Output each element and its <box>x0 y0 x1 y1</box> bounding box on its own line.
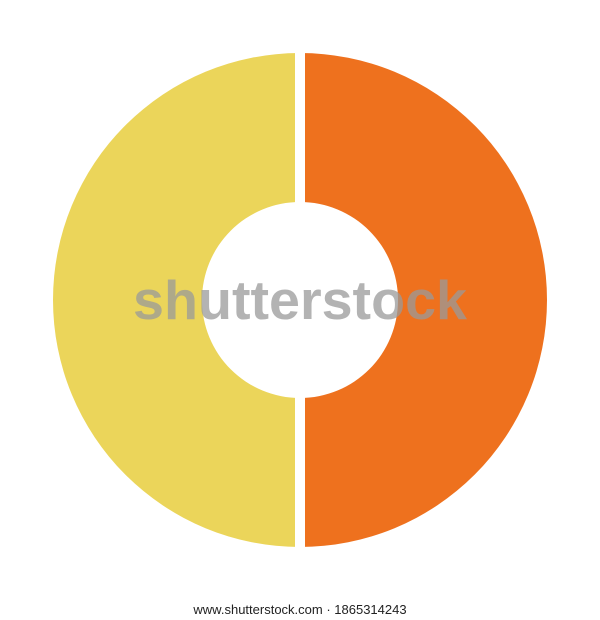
segment: orange right half <box>300 53 547 547</box>
watermark text: shutterstock <box>133 269 467 331</box>
segment: yellow left half <box>53 53 300 547</box>
footer: source line: www.shutterstock.com · 1865314243 <box>193 602 407 617</box>
